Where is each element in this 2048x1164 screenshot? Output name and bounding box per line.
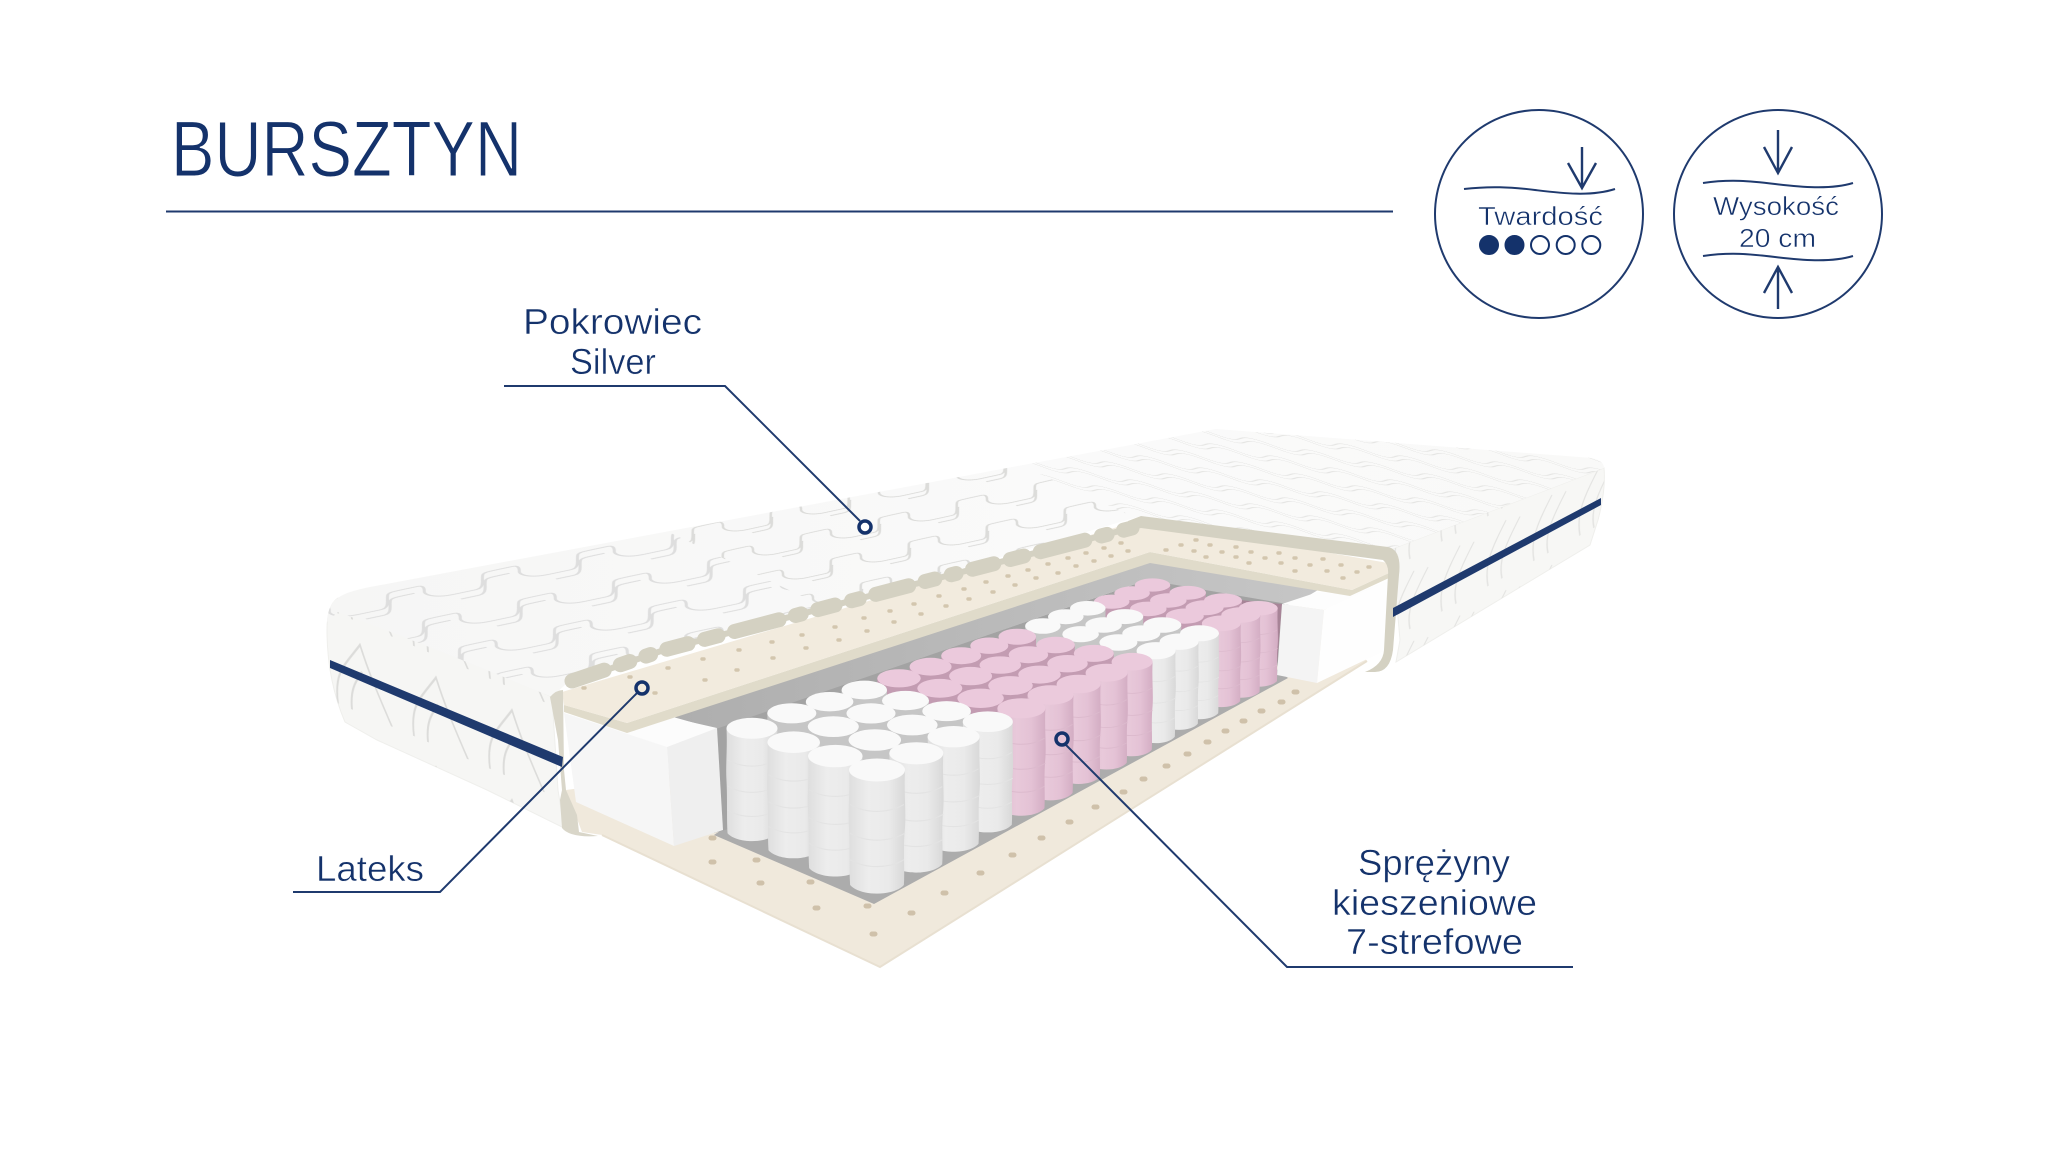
- height value: 20 cm: [1739, 223, 1816, 253]
- latex leader line: [293, 693, 637, 892]
- title rule: [166, 210, 1393, 212]
- lower felt layer: [714, 640, 1288, 904]
- latex marker: [636, 682, 648, 694]
- title: BURSZTYN: [171, 104, 522, 193]
- springs label line 3: 7-strefowe: [1346, 921, 1523, 962]
- navy strap left: [330, 660, 563, 767]
- springs leader line: [1066, 745, 1573, 967]
- cover label line 1: Pokrowiec: [523, 301, 702, 342]
- bottom latex board: [566, 600, 1367, 967]
- icon: height badge: [1674, 110, 1882, 318]
- firmness rating dots: [1480, 236, 1600, 254]
- cover rim with wadding: [550, 516, 1400, 836]
- white springs front zone: [726, 681, 1013, 894]
- navy strap right: [1393, 498, 1601, 617]
- cover leader line: [504, 386, 860, 521]
- callout: springs: [1056, 733, 1573, 967]
- cover: short end face: [327, 598, 564, 828]
- cover marker: [859, 521, 871, 533]
- cover: long side face: [1392, 468, 1604, 662]
- foam block right: [1277, 581, 1388, 683]
- cover: quilted top: [328, 431, 1604, 696]
- top latex layer: [562, 520, 1389, 733]
- springs label line 1: Sprężyny: [1358, 842, 1510, 883]
- springs label line 2: kieszeniowe: [1332, 882, 1537, 923]
- cover label line 2: Silver: [570, 341, 656, 382]
- white springs middle zone: [1025, 601, 1219, 743]
- foam block left: [564, 713, 723, 846]
- firmness label: Twardość: [1478, 201, 1603, 231]
- icon: firmness badge: [1435, 110, 1643, 318]
- upper felt layer: [673, 560, 1318, 729]
- latex label: Lateks: [316, 848, 424, 889]
- pink springs centre zone: [877, 629, 1153, 816]
- cavity back wall: [714, 580, 1290, 833]
- mattress cutaway illustration: [326, 431, 1605, 968]
- height label: Wysokość: [1713, 191, 1839, 221]
- callout: cover: [504, 301, 871, 533]
- springs marker: [1056, 733, 1068, 745]
- pink springs back zone: [1094, 578, 1278, 707]
- pocket springs: [726, 578, 1278, 894]
- callout: latex: [293, 682, 648, 892]
